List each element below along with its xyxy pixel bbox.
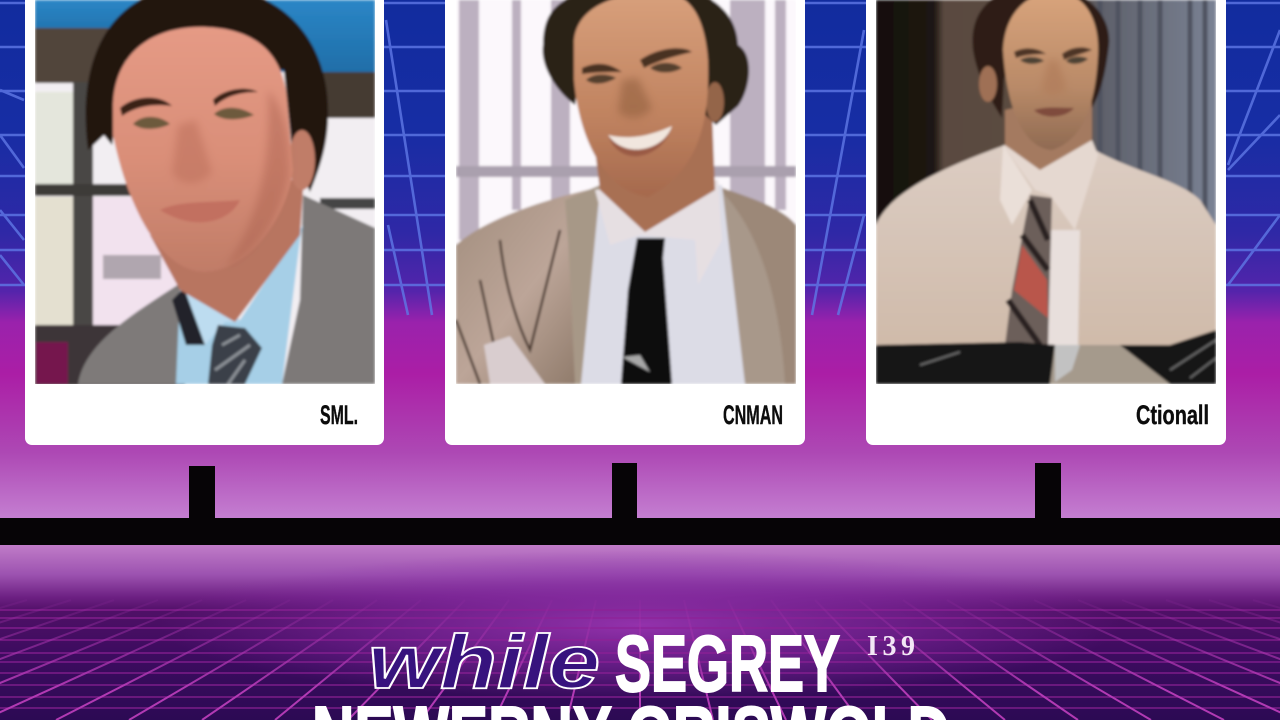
nose [618, 78, 652, 118]
neck [150, 175, 304, 322]
brows [582, 64, 622, 74]
neck [1005, 90, 1092, 170]
timeline tick 1 [189, 466, 215, 519]
panel: card 2 [445, 0, 805, 445]
smile [608, 126, 672, 150]
tie [208, 325, 262, 384]
background: lower gradient [0, 545, 1280, 720]
hair [86, 0, 328, 192]
photo: smiling man in cardigan [456, 0, 796, 384]
photo: man in patterned shirt [876, 0, 1216, 384]
timeline bar [0, 518, 1280, 545]
shirt [581, 185, 745, 384]
background: upper grid [0, 3, 1280, 315]
desk [876, 330, 1216, 384]
timeline tick 3 [1035, 463, 1061, 519]
hair [972, 0, 1109, 118]
title: outlined word: while [368, 620, 600, 705]
background: upper gradient [0, 0, 1280, 520]
tie [621, 238, 672, 384]
collar and placket [1003, 140, 1098, 230]
face [113, 27, 293, 272]
brows [120, 98, 172, 116]
nose [172, 120, 212, 183]
panel: card 1 [25, 0, 384, 445]
ear [289, 130, 315, 190]
photo: man in grey suit [35, 0, 375, 385]
mouth [1034, 108, 1074, 117]
title: small number: I39 [867, 631, 915, 662]
shirt [176, 225, 303, 384]
lips [160, 200, 240, 222]
eyes [586, 74, 616, 84]
brows [1014, 48, 1046, 58]
timeline tick 2 [612, 463, 637, 519]
cardigan [456, 189, 588, 384]
face [1003, 0, 1098, 150]
eyes [1020, 57, 1044, 64]
ear [706, 82, 724, 122]
background: floor glow [160, 550, 1120, 700]
tie [1005, 195, 1052, 345]
suit [78, 280, 185, 384]
face [572, 0, 710, 162]
caption 2: CNMAN [723, 400, 783, 430]
ear [979, 66, 997, 102]
eyes [133, 117, 170, 129]
face shading [234, 96, 294, 260]
background: perspective floor grid [0, 600, 1280, 720]
title: first name: SEGREY [615, 619, 840, 708]
nose [1045, 62, 1062, 91]
tie detail [622, 355, 650, 372]
caption 3: Ctionall [1136, 400, 1209, 430]
caption 1: SML. [320, 400, 358, 430]
hair [543, 0, 749, 125]
shirt [876, 145, 1216, 350]
neck [595, 110, 715, 232]
panel: card 3 [866, 0, 1226, 445]
